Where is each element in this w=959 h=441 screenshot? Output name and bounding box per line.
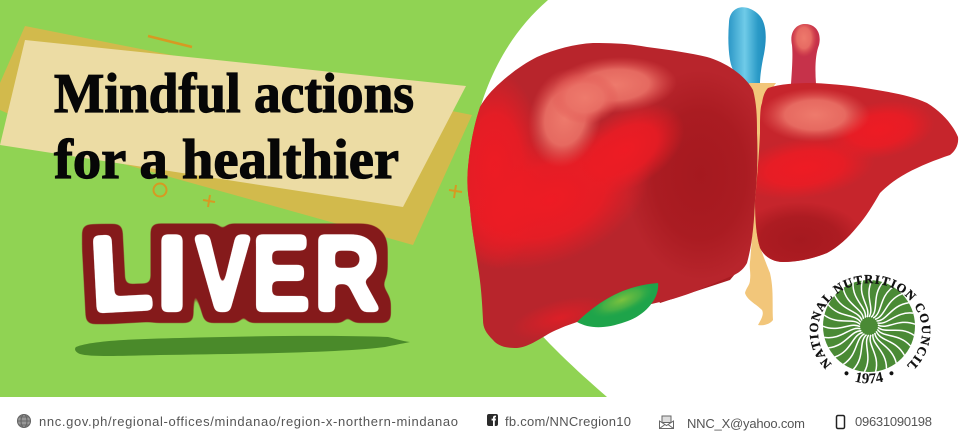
dash mark <box>148 36 192 47</box>
phone text: 09631090198 <box>855 414 932 429</box>
logo radiating rays <box>823 280 915 372</box>
logo ring text: NATIONAL NUTRITION COUNCIL <box>810 274 930 370</box>
email text: NNC_X@yahoo.com <box>687 416 805 431</box>
LIVER wordmark <box>87 211 380 334</box>
plus mark <box>203 195 215 207</box>
LIVER wordmark: I <box>156 213 188 333</box>
left lobe <box>467 43 758 348</box>
LIVER wordmark: E <box>252 213 310 333</box>
gallbladder <box>577 283 658 328</box>
LIVER wordmark: V <box>195 213 250 333</box>
cream front panel <box>0 40 466 207</box>
logo green disc <box>823 280 915 372</box>
National Nutrition Council logo <box>810 274 930 384</box>
title line 1: Mindful actions <box>54 63 414 125</box>
icon: facebook <box>487 414 498 426</box>
footer contact bar <box>18 414 932 431</box>
icon: globe <box>18 414 30 428</box>
logo center dot <box>862 318 876 334</box>
title <box>54 63 414 191</box>
title card backdrop <box>0 26 472 245</box>
LIVER wordmark: R <box>314 213 380 333</box>
brush stroke shadow <box>75 336 410 356</box>
ring mark <box>154 184 166 196</box>
green background panel <box>0 0 607 397</box>
website text: nnc.gov.ph/regional-offices/mindanao/region-x-northern-mindanao <box>39 414 458 429</box>
liver illustration <box>467 7 958 348</box>
icon: phone <box>836 416 844 428</box>
icon: envelope <box>660 416 674 428</box>
LIVER wordmark: L <box>87 211 155 334</box>
red vessel <box>791 24 820 84</box>
blue vessel <box>728 7 766 84</box>
right lobe <box>755 83 958 262</box>
facebook text: fb.com/NNCregion10 <box>505 414 631 429</box>
title line 2: for a healthier <box>54 129 399 191</box>
logo year text: • 1974 • <box>844 371 894 384</box>
bile duct <box>745 83 776 325</box>
small decorative marks <box>148 36 462 207</box>
dark underside strip <box>650 262 745 303</box>
gold back panel <box>0 26 472 245</box>
plus mark right <box>449 185 462 198</box>
